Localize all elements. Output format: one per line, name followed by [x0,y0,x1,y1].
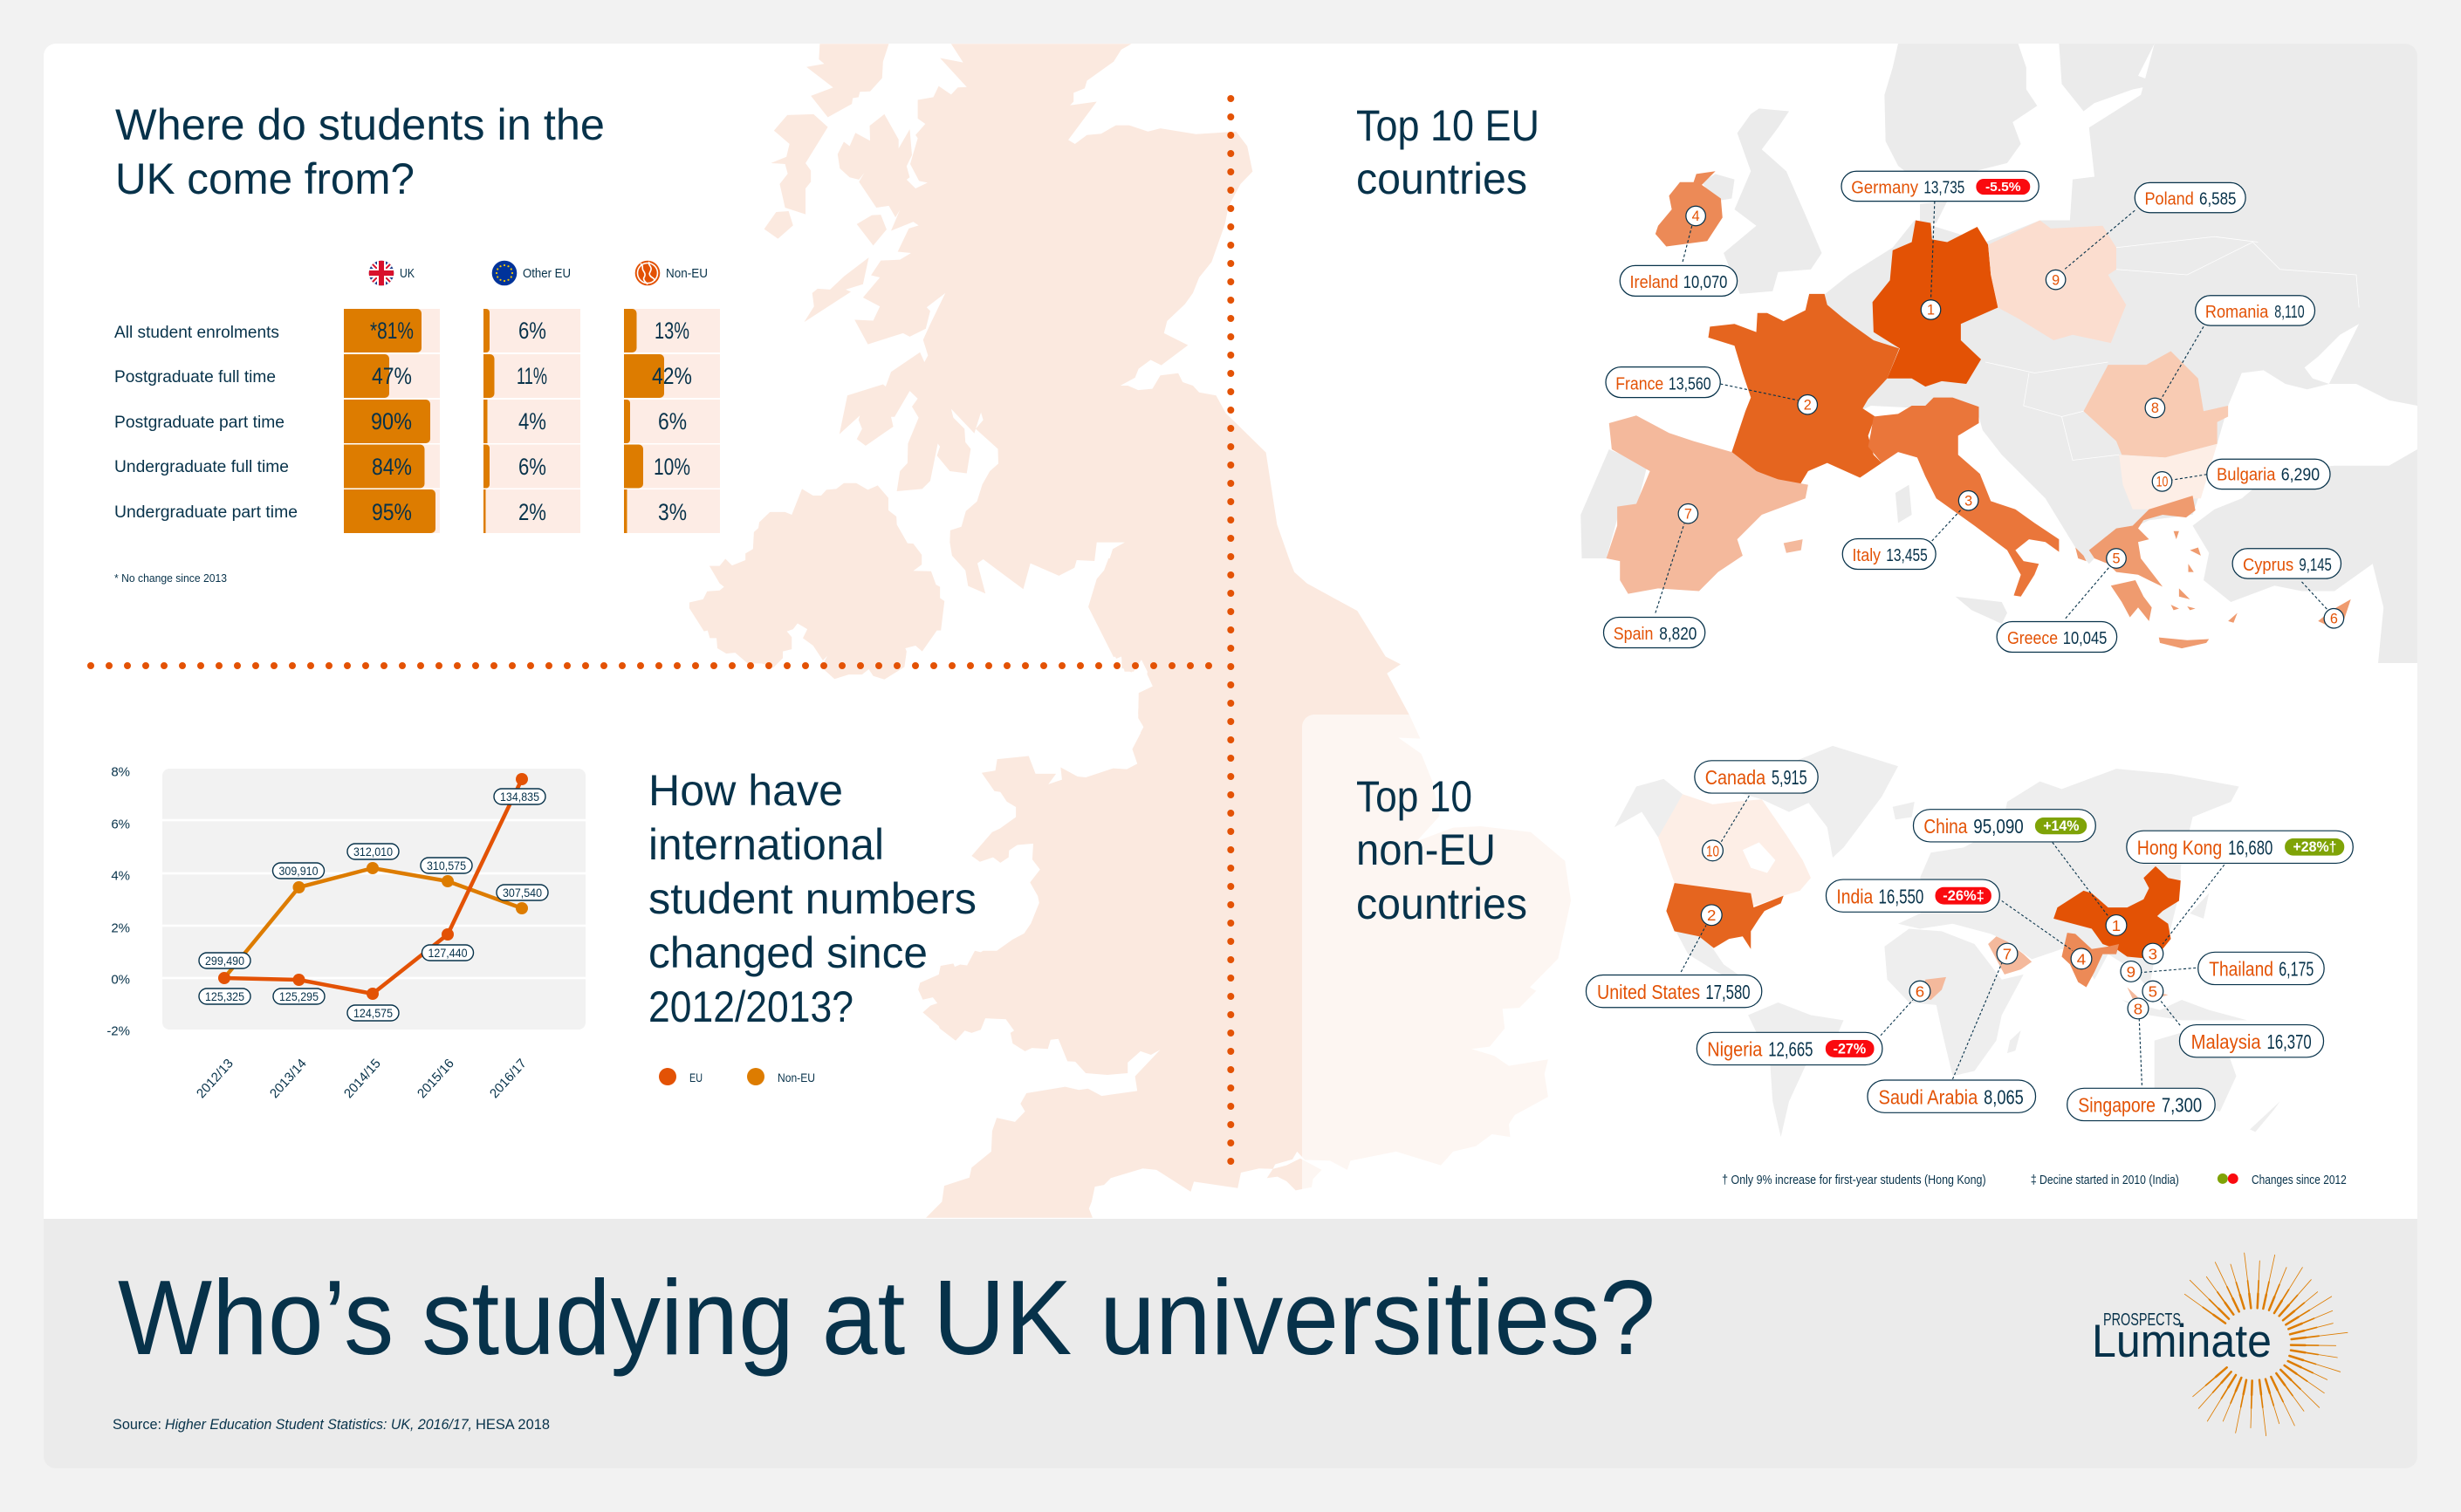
label: India: 16,550 [1878,886,1923,908]
row: undergraduate full time: 84% [372,454,412,480]
label: United States: 17,580 [1705,982,1751,1004]
label: Malaysia [2142,981,2323,1057]
source line: HESA 2018 [476,1416,550,1433]
x axis labels: 2015/16 [415,1056,457,1101]
legend label: UK: UK [400,266,415,281]
logo: Prospects Luminate: PROSPECTS [2103,1310,2181,1330]
map: Poland [1988,220,2126,343]
label: Hong Kong: 3 [2149,946,2157,962]
footnotes and change legend [1722,1173,2347,1187]
map: Nigeria [1920,977,1946,1000]
label: Malaysia: 5 [2149,983,2157,1000]
map: Saudi Arabia [1988,936,2032,975]
map: France [1709,294,1899,485]
row: undergraduate full time: Undergraduate full time [114,458,289,476]
logo: Prospects Luminate: Luminate [2092,1316,2272,1367]
label: United States [1587,905,1762,1008]
heading: where do students come from: UK come from? [115,154,415,203]
label: Ireland: Ireland [1630,272,1678,292]
label: United States: 2 [1707,907,1716,924]
label: China: 1 [2112,917,2121,934]
x axis labels: 2016/17 [487,1056,530,1101]
row: postgraduate part time: 90% [371,408,412,434]
logo: Prospects Luminate [2092,1253,2348,1436]
label: China: +14% [2043,818,2079,834]
label: Romania: 8 [2151,400,2159,416]
chart value labels: 124,575 [353,1007,393,1020]
footnotes and change legend: ‡ Decine started in 2010 (India) [2031,1173,2179,1187]
heading: how have international student numbers changed [648,766,977,1031]
label: Malaysia: Malaysia [2191,1031,2261,1054]
label: Canada: 5,915 [1772,767,1807,790]
map: Romania [2084,351,2228,457]
label: Romania: 8,110 [2274,302,2305,322]
chart legend: Non-EU [778,1071,815,1084]
label: Nigeria: Nigeria [1707,1038,1763,1061]
row: postgraduate full time: Postgraduate full time [114,368,276,387]
legend label: Non-EU: Non-EU [666,266,708,281]
label: Hong Kong [2127,831,2353,964]
label: Thailand: Thailand [2209,958,2273,981]
label: Spain: 8,820 [1659,624,1697,644]
panel: line chart of international student numbers [106,764,586,1101]
label: Hong Kong: 16,680 [2228,837,2272,859]
map: China [2053,866,2181,958]
footer band [44,1219,2417,1468]
panel: lightened overlay behind top 10 non-EU [1302,715,2417,1219]
label: Hong Kong: +28%† [2293,839,2337,855]
label: Ireland: 10,070 [1683,272,1727,292]
row: undergraduate full time: 10% [654,454,690,480]
source line: Source: [113,1416,161,1433]
label: Canada [1695,761,1818,861]
y axis labels: -2% [106,1024,130,1038]
chart value labels: 312,010 [353,845,393,859]
label: Spain [1604,504,1705,647]
row: undergraduate part time: Undergraduate part time [114,503,298,522]
label: Bulgaria: 6,290 [2281,465,2320,485]
label: Singapore [2067,998,2215,1121]
footnotes and change legend: † Only 9% increase for first-year students (Hong Kong) [1722,1173,1986,1187]
x axis labels: 2014/15 [341,1056,384,1101]
label: Bulgaria [2152,459,2330,491]
label: Greece: 10,045 [2063,628,2107,648]
row: undergraduate full time: 6% [518,454,546,480]
map: Bulgaria [2119,444,2218,510]
row: all student enrolments: All student enrolments [114,324,279,342]
chart value labels: 309,910 [279,865,318,878]
label: Nigeria: -27% [1834,1041,1866,1057]
label: Greece: 5 [2112,551,2121,567]
row: postgraduate part time: Postgraduate part time [114,414,284,432]
label: Nigeria: 6 [1916,983,1924,1000]
label: Saudi Arabia: Saudi Arabia [1878,1086,1978,1109]
heading: top 10 non-EU countries: Top 10 [1356,772,1472,821]
heading: how have international student numbers changed: student numbers [648,874,977,923]
label: Italy: 3 [1964,493,1972,509]
x axis labels: 2013/14 [267,1056,310,1101]
label: Italy: Italy [1852,545,1882,565]
heading: where do students come from: Where do students in the [115,100,605,149]
map: Spain [1607,415,1808,594]
label: China: China [1923,816,1968,838]
sunburst rays [2184,1253,2348,1436]
label: Cyprus: Cyprus [2243,555,2293,575]
label: Romania [2145,296,2314,418]
y axis labels [106,764,130,1038]
label: Singapore: 7,300 [2162,1094,2202,1117]
label: Canada: Canada [1705,767,1766,790]
label: France [1606,367,1817,414]
label: Germany: -5.5% [1985,180,2021,195]
heading: how have international student numbers changed: 2012/2013? [648,982,853,1031]
label: Poland: 9 [2052,272,2060,288]
white main card [44,44,2417,1219]
y axis labels: 2% [111,921,130,935]
label: Italy: 13,455 [1886,545,1928,565]
map: Italy [1868,398,2059,597]
chart value labels: 310,575 [427,859,466,872]
map: USA [1666,883,1784,949]
grey world land [1614,746,2279,1137]
panel: top 10 EU labels [1604,171,2344,653]
label: Saudi Arabia: 7 [2003,946,2012,962]
main title: Who’s studying at UK universities? [118,1258,1656,1377]
label: Spain: Spain [1614,624,1653,644]
label: India: 4 [2077,951,2086,968]
panel: europe map [1580,44,2417,663]
heading: top 10 EU countries: Top 10 EU [1356,101,1539,150]
label: Cyprus: 6 [2330,611,2338,626]
chart value labels: 134,835 [500,790,539,804]
chart value labels: 127,440 [428,947,468,960]
label: Spain: 7 [1684,506,1692,522]
chart value labels: 307,540 [503,886,542,900]
label: China [1913,810,2127,935]
label: Hong Kong: Hong Kong [2137,837,2222,859]
label: Germany: 13,735 [1923,177,1964,197]
map: Greece [2075,496,2238,648]
heading: how have international student numbers changed: changed since [648,928,928,977]
y axis labels: 6% [111,817,130,832]
heading: top 10 non-EU countries [1356,772,1527,928]
label: Thailand: 9 [2127,963,2135,981]
label: Germany: Germany [1851,177,1919,197]
legend label: Other EU: Other EU [523,266,571,281]
label: Cyprus: 9,145 [2299,555,2332,575]
chart legend: EU [689,1071,703,1084]
chart value labels: 299,490 [205,954,244,968]
label: China: 95,090 [1973,816,2024,838]
y axis labels: 0% [111,972,130,988]
chart background [162,769,586,1030]
label: United States: United States [1597,982,1700,1004]
map: Malaysia [2128,987,2168,999]
label: India: -26%‡ [1943,887,1985,904]
row: undergraduate part time: 3% [658,499,687,525]
label: Poland: Poland [2145,188,2194,209]
x axis labels: 2012/13 [194,1056,237,1101]
label: Saudi Arabia [1868,943,2035,1112]
x axis labels [194,1056,530,1101]
label: Malaysia: 16,370 [2267,1031,2312,1054]
label: Nigeria [1697,981,1930,1065]
label: Bulgaria: 10 [2156,475,2168,490]
heading: top 10 EU countries: countries [1356,154,1527,203]
map: India [2061,933,2119,987]
label: Thailand: 6,175 [2279,958,2314,981]
heading: how have international student numbers changed: international [648,820,884,869]
label: Saudi Arabia: 8,065 [1984,1086,2024,1109]
row: postgraduate full time [114,354,720,398]
icon: UK flag [368,260,394,286]
label: Thailand [2121,952,2324,985]
grey background land [1580,44,2417,663]
map: Canada [1658,794,1811,906]
label: Canada: 10 [1706,843,1719,859]
label: Singapore: 8 [2134,1001,2142,1017]
map: Germany [1873,220,1998,387]
row: undergraduate full time [114,445,720,489]
row: postgraduate part time: 4% [518,408,546,434]
map: Cyprus [2318,599,2351,625]
y axis labels: 8% [111,764,130,780]
row: all student enrolments: 6% [518,318,546,344]
row: undergraduate part time: 2% [518,499,546,525]
icon: globe [635,261,660,285]
label: France: France [1615,373,1663,393]
chart value labels [199,789,548,1021]
label: Germany: 1 [1927,303,1935,318]
heading: how have international student numbers changed: How have [648,766,843,815]
panel: where do students come from [114,100,720,585]
chart legend [659,1068,815,1085]
label: Greece: Greece [2007,628,2058,648]
heading: where do students come from [115,100,605,203]
label: France: 2 [1804,397,1812,413]
label: Cyprus [2232,549,2344,628]
source line: Higher Education Student Statistics: UK, 2016/17, [165,1416,472,1433]
row: postgraduate full time: 47% [372,363,412,389]
label: Ireland [1620,206,1738,296]
chart value labels: 125,295 [279,990,319,1003]
row: all student enrolments: *81% [370,318,414,344]
label: India [1826,879,2092,969]
label: Singapore: Singapore [2078,1094,2156,1117]
label: India: India [1836,886,1874,908]
label: Romania: Romania [2205,302,2269,322]
row: all student enrolments: 13% [655,318,689,344]
icon: EU flag [492,261,517,285]
row: undergraduate part time [114,489,720,533]
label: Poland [2046,182,2245,290]
row: all student enrolments [114,309,720,352]
line: non-EU [224,862,528,978]
label: Poland: 6,585 [2199,188,2236,209]
label: France: 13,560 [1669,373,1711,393]
y axis labels: 4% [111,869,130,883]
row: postgraduate part time [114,400,720,443]
panel: world map [1587,746,2353,1187]
footnotes and change legend: Changes since 2012 [2252,1173,2347,1187]
row: postgraduate part time: 6% [658,408,687,434]
line: EU [218,773,528,1000]
label: Bulgaria: Bulgaria [2217,465,2276,485]
chart value labels: 125,325 [205,990,244,1003]
background UK map [689,44,1571,1218]
label: Ireland: 4 [1692,209,1700,224]
row: postgraduate full time: 42% [652,363,692,389]
label: Italy [1842,490,1978,569]
label: Greece [1997,549,2126,653]
heading: top 10 EU countries [1356,101,1539,203]
row: undergraduate part time: 95% [372,499,412,525]
heading: top 10 non-EU countries: non-EU [1356,825,1496,874]
map: Ireland [1656,171,1723,246]
row: postgraduate full time: 11% [517,363,547,389]
footnote: no change since 2013: * No change since 2013 [114,571,227,585]
label: Nigeria: 12,665 [1768,1038,1813,1061]
heading: top 10 non-EU countries: countries [1356,879,1527,928]
label: Germany [1841,171,2039,319]
